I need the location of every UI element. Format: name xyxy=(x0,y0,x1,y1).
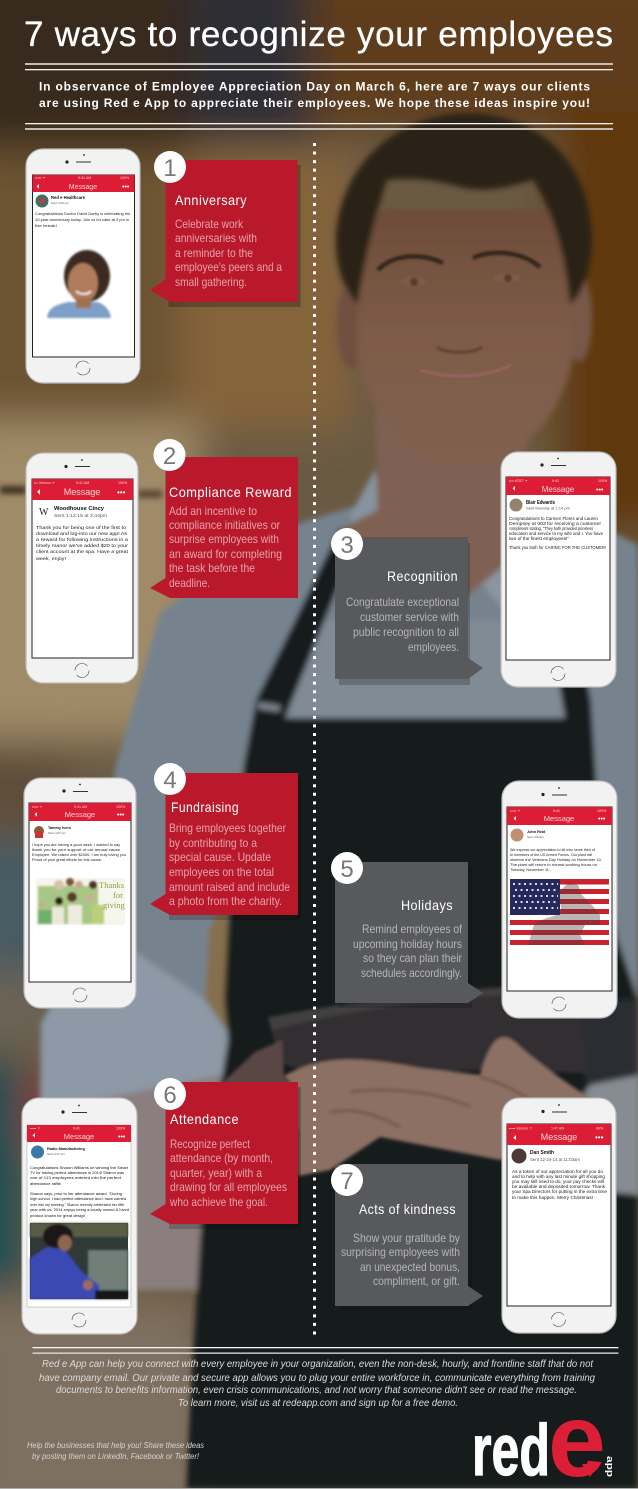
callout 1: Anniversary: small gathering. xyxy=(175,275,247,289)
phone 4: fundraising message: Tammy Ivers xyxy=(48,826,71,830)
footer paragraph: documents to benefits information, even crisis communications, and not worry that someone didn't see or read the message. xyxy=(56,1385,577,1396)
callout 4: Fundraising xyxy=(150,763,301,920)
phone 2: compliance message: 9:41 AM xyxy=(76,481,89,485)
callout 5: Holidays: Remind employees of xyxy=(362,922,463,936)
callout 5: Holidays: Holidays xyxy=(401,897,453,913)
intro text: are using Red e App to appreciate their employees. We hope these ideas inspire you! xyxy=(39,96,590,110)
callout 3: Recognition: employees. xyxy=(408,640,459,654)
phone 6: attendance message: Congratulations Sharon Williams on winning the Smart xyxy=(30,1165,129,1170)
phone 6: attendance message: product known for great design xyxy=(30,1213,85,1218)
callout 7: Acts of kindness: 7 xyxy=(340,1168,354,1195)
callout 4: Fundraising: Fundraising xyxy=(171,799,239,815)
phone 1: anniversary message: 100% xyxy=(120,176,130,180)
callout 1: Anniversary: anniversaries with xyxy=(175,231,257,245)
phone 2: compliance message: download and log-into our new app! As xyxy=(36,531,128,536)
phone 5: holidays message: ••••• ᯤ xyxy=(510,809,521,813)
phone 2: compliance message: client account at the spa. Have a great xyxy=(36,549,129,554)
phone 4: fundraising message: ••• xyxy=(117,812,125,819)
callout 2: Compliance Reward: the task before the xyxy=(169,561,255,575)
phone 3: recognition message xyxy=(501,452,616,687)
callout 5: Holidays: upcoming holiday hours xyxy=(353,937,462,951)
header rules xyxy=(25,63,613,130)
callout 5: Holidays: schedules accordingly. xyxy=(361,966,462,980)
phone 1: anniversary message: Congratulations Doctor David Darby is celebrating his xyxy=(35,211,130,216)
callout 7: Acts of kindness: Acts of kindness xyxy=(359,1201,456,1217)
phone 2: compliance message: ••• xyxy=(117,488,126,497)
phone 7: acts of kindness message: Dan Smith xyxy=(530,1150,554,1156)
callout 3: Recognition: public recognition to all xyxy=(353,625,459,639)
logo: red e app: app xyxy=(604,1456,615,1477)
phone 6: attendance message: Message xyxy=(64,1132,94,1141)
phone 5: holidays message: Tuesday, November 11. xyxy=(510,867,550,872)
callout 4: Fundraising: Bring employees together xyxy=(169,821,286,835)
bottom edge strip xyxy=(0,1488,638,1489)
intro text xyxy=(39,80,590,110)
phone 7: acts of kindness message: be available and deposited tomorrow. Thank xyxy=(512,1184,606,1189)
callout 4: Fundraising: special cause. Update xyxy=(169,850,271,864)
phone 1: anniversary message: ••••• ᯤ xyxy=(35,176,46,180)
footer paragraph: To learn more, visit us at redeapp.com and sign up for a free demo. xyxy=(178,1398,458,1409)
title: 7 ways to recognize your employees xyxy=(24,15,613,54)
callout 2: Compliance Reward: Compliance Reward xyxy=(169,484,292,500)
phone 5: holidays message xyxy=(502,781,617,1018)
share prompt: by posting them on LinkedIn, Facebook or Twitter! xyxy=(32,1451,200,1461)
phone 5: holidays message: observe the Veterans Day Holiday on November 10. xyxy=(510,857,602,862)
callout 1: Anniversary: Anniversary xyxy=(175,192,247,208)
right sleeve xyxy=(560,1075,638,1195)
photo: thanks for giving xyxy=(36,878,125,925)
callout 4: Fundraising: by contributing to a xyxy=(169,836,257,850)
callout 5: Holidays: so they can plan their xyxy=(363,951,462,965)
phone 3: recognition message: two of the finest employees!" xyxy=(509,536,569,541)
phone 2: compliance message: week, enjoy! xyxy=(36,556,66,561)
phone 4: fundraising message: ••••• ᯤ xyxy=(32,805,43,809)
phone 3: recognition message: Thank you both for CARING FOR THE CUSTOMER! xyxy=(509,545,606,550)
footer rules xyxy=(32,1347,618,1354)
phone 2: compliance message: W xyxy=(39,507,49,518)
callout 2: Compliance Reward: Add an incentive to xyxy=(169,504,257,518)
callout 1: Anniversary xyxy=(150,151,300,307)
phone 7: acts of kindness message: your Spa Directors for putting in the extra time xyxy=(512,1189,607,1194)
callout 6: Attendance: Attendance xyxy=(170,1111,239,1127)
phone 3: recognition message: Dempsey at 003 for receiving a customer xyxy=(509,521,602,526)
callout 7: Acts of kindness: an unexpected bonus, xyxy=(360,1260,460,1274)
phone 1: anniversary message: 9:41 AM xyxy=(78,176,91,180)
phone 7: acts of kindness message: you may still need to do, your pay checks will xyxy=(512,1179,604,1184)
phone 4: fundraising message xyxy=(24,778,136,1008)
phone 2: compliance message: timely manor we've added $20 to your xyxy=(36,543,129,548)
tablet xyxy=(268,987,589,1075)
phone 1: anniversary message: Message xyxy=(69,184,97,191)
photo: thanks for giving: Thanks xyxy=(99,880,124,890)
phone 4: fundraising message: Proud of your great efforts for this cause. xyxy=(32,857,102,862)
phone 2: compliance message: Thank you for being one of the first to xyxy=(36,525,127,530)
phone 6: attendance message: 100% xyxy=(116,1126,126,1130)
phone 5: holidays message: Message xyxy=(544,814,574,823)
phone 1: anniversary message: 10-year anniversary today. Join us for cake at 3 pm in xyxy=(35,217,129,222)
photo: thanks for giving: for xyxy=(113,890,123,900)
photo of nurse xyxy=(47,250,111,318)
phone 3: recognition message: 100% xyxy=(598,479,608,483)
callout 4: Fundraising: amount raised and include xyxy=(169,880,290,894)
phone 1: anniversary message: Sent 4:09 pm xyxy=(51,201,69,205)
hands xyxy=(220,1040,300,1130)
phone 7: acts of kindness message: and to help with any last minute gift shopping xyxy=(512,1174,605,1179)
phone 2: compliance message: ••• Verizon ᯤ xyxy=(34,481,56,485)
phone 6: attendance message: one of 113 employees entered into the perfect xyxy=(30,1175,122,1180)
share prompt: Help the businesses that help you! Share these ideas xyxy=(27,1440,205,1450)
callout 1: Anniversary: Celebrate work xyxy=(175,217,244,231)
callout 3: Recognition: customer service with xyxy=(360,610,459,624)
callout 6: Attendance: who achieve the goal. xyxy=(169,1195,268,1209)
phone 4: fundraising message: Sent 4:07 pm xyxy=(48,831,66,835)
phone 6: attendance message: Sent 3:27 pm xyxy=(47,1152,65,1156)
phone 5: holidays message: 9:41 xyxy=(553,809,560,813)
footer paragraph xyxy=(39,1359,595,1409)
phone 6: attendance message: Radio Manufacturing xyxy=(47,1147,85,1151)
callout 6: Attendance xyxy=(150,1078,301,1229)
phone 3: recognition message: 9:41 xyxy=(552,479,559,483)
callout 5: Holidays: 5 xyxy=(340,856,354,883)
callout 6: Attendance: 6 xyxy=(163,1082,177,1109)
phone 1: anniversary message: Red e Healthcare xyxy=(51,195,86,200)
callout 4: Fundraising: 4 xyxy=(163,767,177,794)
apron xyxy=(185,520,638,1489)
phone 6: attendance message: TV for having perfect attendance in 2014! Sharon was xyxy=(30,1170,124,1175)
phone 7: acts of kindness message: As a token of our appreciation for all you do xyxy=(512,1169,603,1174)
phone 4: fundraising message: thank you for your support of our annual cause xyxy=(32,847,121,852)
phone 7: acts of kindness message: ••••• Verizon ᯤ xyxy=(509,1126,533,1130)
phone 7: acts of kindness message: 1:47 AM xyxy=(551,1126,564,1130)
phone 7: acts of kindness message: Sent 12-24-14 at 11:03am xyxy=(530,1157,580,1162)
phone 6: attendance message: ••••• ᯤ xyxy=(30,1126,41,1130)
phone 5: holidays message: The plant will return to normal working hours on xyxy=(510,862,597,867)
phone 3: recognition message: compliment stating, "They both provided priceless xyxy=(509,526,594,531)
callout 1: Anniversary: 1 xyxy=(163,155,177,182)
dotted centre line xyxy=(313,143,316,1338)
photo: factory worker xyxy=(30,1223,128,1299)
phone 3: recognition message: ••• xyxy=(596,487,604,494)
phone 3: recognition message: •••• AT&T ᯤ xyxy=(509,479,529,483)
phone 2: compliance message: a reward for following instructions in a xyxy=(36,537,129,542)
callout 7: Acts of kindness: compliment, or gift. xyxy=(373,1274,460,1288)
phone 3: recognition message: Congratulations to Carmen Flores and Lauren xyxy=(509,516,598,521)
phone 6: attendance message: high school, I had perfect attendance and I have carried xyxy=(30,1196,126,1201)
neck and head xyxy=(336,113,592,600)
shirt xyxy=(40,500,638,1195)
phone 4: fundraising message: I hope you are having a good week. I wanted to say xyxy=(32,842,120,847)
callout 7: Acts of kindness: Show your gratitude by xyxy=(353,1231,460,1245)
phone 6: attendance message xyxy=(22,1098,137,1334)
callout 3: Recognition: Congratulate exceptional xyxy=(346,595,459,609)
phone 7: acts of kindness message xyxy=(502,1098,616,1333)
callout 4: Fundraising: employees on the total xyxy=(169,865,274,879)
callout 2: Compliance Reward: an award for completing xyxy=(169,547,282,561)
phone 2: compliance message: Sent 1:12:15 at 2:44pm xyxy=(54,513,107,518)
phone 5: holidays message: ••• xyxy=(598,816,606,823)
callout 2: Compliance Reward: surprise employees with xyxy=(169,532,279,546)
phone 2: compliance message: Message xyxy=(64,487,100,497)
phone 7: acts of kindness message: Message xyxy=(541,1132,577,1142)
phone 5: holidays message: We express our appreciation to all who serve their of xyxy=(510,847,596,852)
callout 4: Fundraising: a photo from the charity. xyxy=(169,894,282,908)
phone 3: recognition message: Blair Edwards xyxy=(526,500,555,506)
phone 1: anniversary message xyxy=(26,149,140,383)
phone 5: holidays message: John Reid xyxy=(527,830,546,834)
logo: red e app: red xyxy=(472,1411,550,1489)
photo: thanks for giving: giving xyxy=(103,900,125,910)
phone 5: holidays message: 100% xyxy=(597,809,607,813)
callout 7: Acts of kindness xyxy=(331,1164,483,1310)
callout 6: Attendance: drawing for all employees xyxy=(170,1180,287,1194)
phone 5: holidays message: Sent 4:52pm xyxy=(527,835,545,839)
callout 2: Compliance Reward xyxy=(150,439,298,598)
phone 6: attendance message: year with us. 2014 enjoys being a locally owned & loved xyxy=(30,1207,129,1212)
phone 6: attendance message: Sharon says, prior to her attendance award, "During xyxy=(30,1191,122,1196)
callout 1: Anniversary: a reminder to the xyxy=(175,246,253,260)
callout 2: Compliance Reward: deadline. xyxy=(169,576,210,590)
phone 4: fundraising message: Message xyxy=(65,810,95,819)
callout 7: Acts of kindness: surprising employees with xyxy=(341,1245,460,1259)
phone 1: anniversary message: the break! xyxy=(35,223,57,228)
callout 2: Compliance Reward: compliance initiatives or xyxy=(169,518,280,532)
phone 7: acts of kindness message: ••• xyxy=(595,1133,604,1142)
footer paragraph: Red e App can help you connect with every employee in your organization, even the non-desk, hourly, and frontline staff that do not xyxy=(42,1359,594,1370)
callout 6: Attendance: quarter, year) with a xyxy=(170,1166,262,1180)
callout 6: Attendance: attendance (by month, xyxy=(170,1151,273,1165)
share prompt xyxy=(27,1440,205,1461)
phone 4: fundraising message: 100% xyxy=(116,805,126,809)
phone 3: recognition message: Sent Monday at 1:14 pm xyxy=(526,506,571,510)
phone 4: fundraising message: 9:41 AM xyxy=(74,805,87,809)
callout 3: Recognition: 3 xyxy=(340,532,354,559)
phone 1: anniversary message: ••• xyxy=(122,184,130,191)
callout 3: Recognition: Recognition xyxy=(387,568,458,584)
phone 5: holidays message: to members of the US Armed Forces. Our plant will xyxy=(510,852,592,857)
phone 3: recognition message: Message xyxy=(542,485,575,494)
intro text: In observance of Employee Appreciation Day on March 6, here are 7 ways our clients xyxy=(39,80,590,94)
phone 2: compliance message xyxy=(26,453,138,683)
callout 6: Attendance: Recognize perfect xyxy=(170,1137,251,1151)
phone 6: attendance message: attendance raffle. xyxy=(30,1181,62,1186)
phone 2: compliance message: 100% xyxy=(118,481,128,485)
callout 1: Anniversary: employee's peers and a xyxy=(175,260,282,274)
callout 5: Holidays xyxy=(331,852,483,1008)
phone 6: attendance message: over into my working." Sharon recently celebrated her fifth xyxy=(30,1202,124,1207)
callout 3: Recognition xyxy=(331,528,483,685)
phone 7: acts of kindness message: to make this happen. Merry Christmas! xyxy=(512,1195,593,1200)
phone 3: recognition message: education and service to my wife and I. You have xyxy=(509,531,603,536)
phone 6: attendance message: ••• xyxy=(118,1134,126,1141)
phone 2: compliance message: Woodhouse Cincy xyxy=(54,506,104,512)
phone 7: acts of kindness message: 84% xyxy=(596,1126,604,1130)
logo: red e app xyxy=(472,1383,615,1489)
phone 4: fundraising message: Employee. We raised over $2000. I am truly loving you xyxy=(32,852,126,857)
icon: american flag with saluting soldier xyxy=(510,879,609,945)
callout 2: Compliance Reward: 2 xyxy=(163,443,176,470)
phone 6: attendance message: 9:41 xyxy=(73,1126,80,1130)
footer paragraph: have company email. Our private and secure app allows you to plug your entire workforce in, communicate everything from training xyxy=(39,1373,595,1384)
